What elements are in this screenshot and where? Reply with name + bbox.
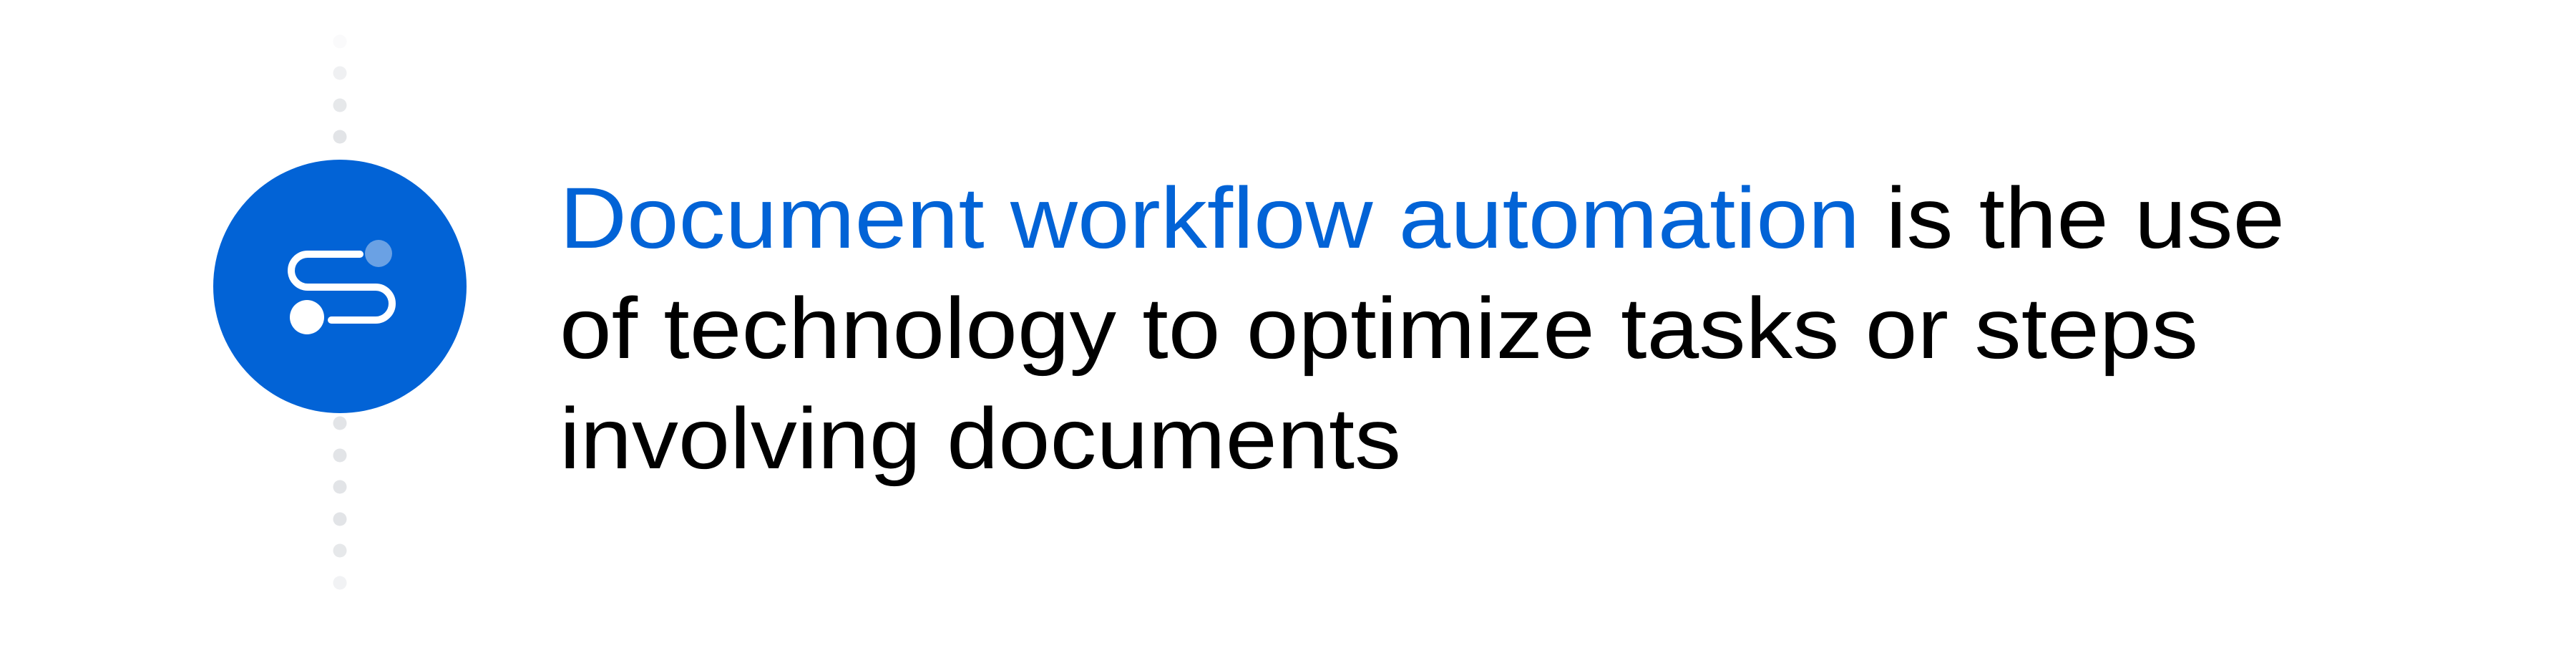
definition text: of technology to optimize tasks or steps	[560, 279, 2198, 377]
definition text: involving documents	[560, 390, 1401, 487]
definition text	[560, 169, 2285, 487]
definition text: Document workflow automation is the use	[560, 169, 2285, 266]
icon: workflow circle	[213, 160, 467, 413]
dotted timeline	[333, 34, 346, 590]
